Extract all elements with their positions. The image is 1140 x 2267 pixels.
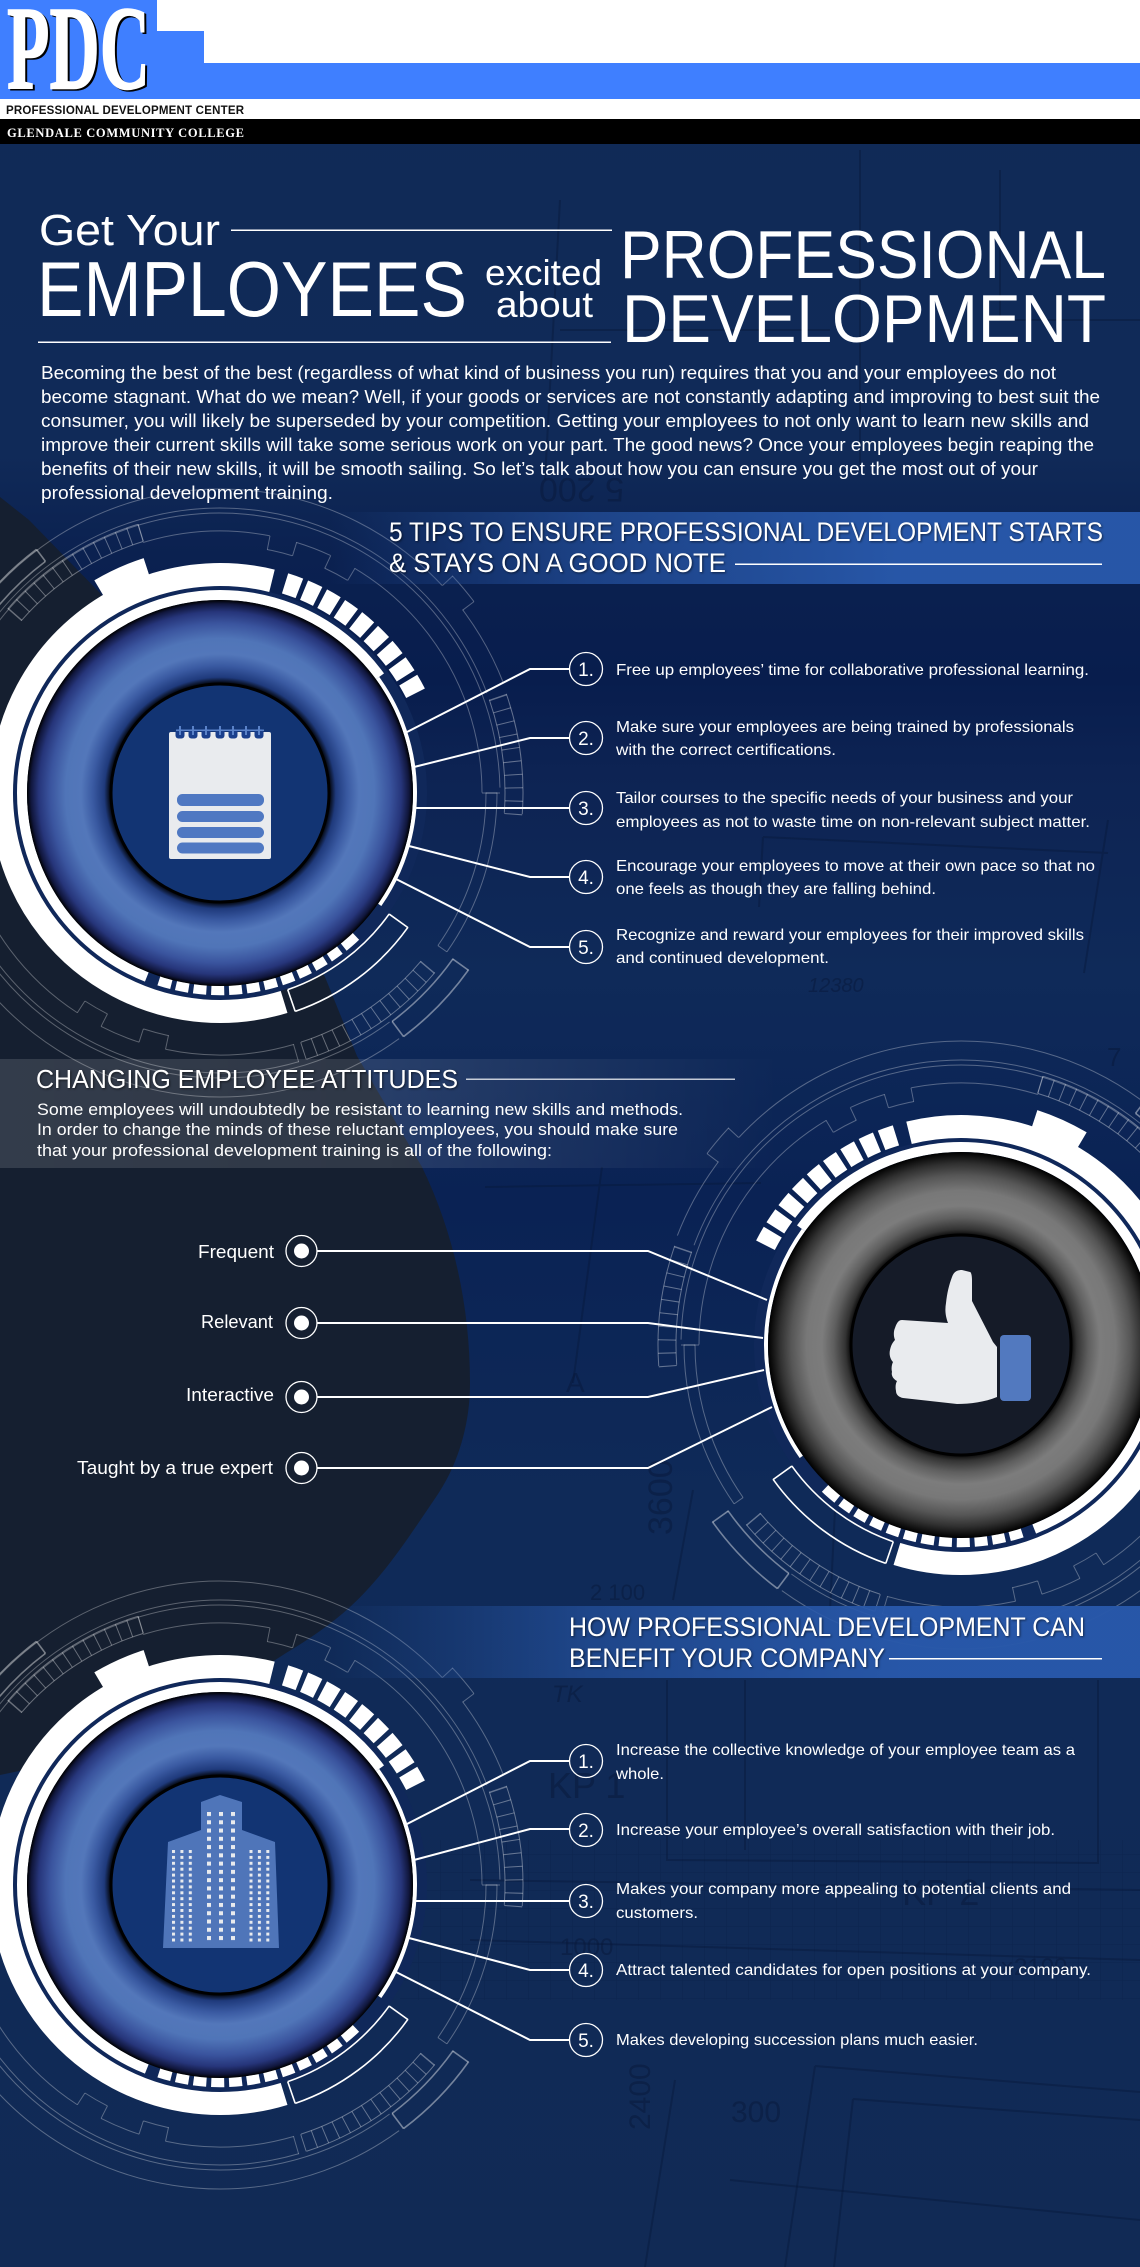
blueprint background: 12380 [808, 975, 864, 997]
title: get your: Get Your [39, 206, 220, 255]
item interactive [186, 1382, 317, 1412]
intro paragraph: become stagnant. What do we mean? Well, if your goods or services are not constantly adapting and improving to best suit the [41, 387, 1100, 407]
logo subtitle: PROFESSIONAL DEVELOPMENT CENTER [6, 105, 245, 117]
banner 2 paragraph: Some employees will undoubtedly be resistant to learning new skills and methods. [37, 1100, 683, 1119]
blueprint background: 5 200 [539, 470, 624, 508]
dial 3 disc [27, 1692, 413, 2078]
benefit 3: Makes your company more appealing to potential clients and [616, 1881, 1071, 1898]
tips list [570, 652, 1095, 967]
benefit 1: Increase the collective knowledge of your employee team as a [616, 1742, 1075, 1759]
banner 1 band [0, 512, 1140, 584]
banner 3 heading [569, 1612, 1085, 1673]
blueprint background: 7 [1107, 1042, 1121, 1072]
tip 1: Free up employees’ time for collaborative professional learning. [616, 662, 1089, 679]
benefit 5: 5. [578, 2031, 594, 2052]
benefit 5: Makes developing succession plans much easier. [616, 2032, 978, 2049]
icon: notepad [169, 726, 271, 859]
tip 3: employees as not to waste time on non-relevant subject matter. [616, 814, 1090, 831]
item interactive: Interactive [186, 1385, 274, 1405]
banner: 5 tips [0, 512, 1140, 584]
blueprint background [400, 150, 1140, 2267]
banner: how professional development can benefit [0, 1606, 1140, 1678]
blueprint background: KP 1 [548, 1765, 625, 1806]
item relevant: Relevant [201, 1312, 273, 1332]
benefit 1 [570, 1742, 1075, 1783]
benefits list [570, 1742, 1091, 2056]
logo blue band [0, 0, 1140, 99]
benefit 4: 4. [578, 1961, 594, 1982]
white top area [0, 0, 1140, 99]
black strip [0, 119, 1140, 144]
intro paragraph: Becoming the best of the best (regardless of what kind of business you run) requires that you and your employees do not [41, 363, 1056, 383]
blueprint background: 2400 [624, 2063, 657, 2130]
tip 4: Encourage your employees to move at their own pace so that no [616, 858, 1095, 875]
header logo band [0, 0, 1140, 144]
tip 3 [570, 790, 1090, 831]
tip 1: 1. [578, 660, 594, 681]
logo letters PDC [7, 0, 152, 116]
banner 2 paragraph [37, 1100, 683, 1160]
banner 2 heading: CHANGING EMPLOYEE ATTITUDES [36, 1064, 458, 1094]
title rule lower [38, 342, 611, 343]
banner: changing employee attitudes [0, 1059, 780, 1168]
title [37, 206, 1106, 357]
benefit 2 [570, 1814, 1055, 1846]
tip 2: 2. [578, 729, 594, 750]
dial 2 disc [768, 1152, 1140, 1538]
benefit 1: 1. [578, 1752, 594, 1773]
benefit 3: customers. [616, 1905, 698, 1922]
tip 5: Recognize and reward your employees for their improved skills [616, 927, 1084, 944]
tip 3: 3. [578, 799, 594, 820]
tip 3: Tailor courses to the specific needs of your business and your [616, 790, 1074, 807]
dial 1 rings [0, 344, 669, 1242]
banner 3 heading: BENEFIT YOUR COMPANY [569, 1643, 885, 1673]
tip 2: Make sure your employees are being trained by professionals [616, 719, 1074, 736]
banner 3 band [0, 1606, 1140, 1678]
blueprint background: A [566, 1367, 585, 1398]
dial 3 rings [0, 1436, 669, 2267]
benefits leaders [396, 1761, 570, 2040]
dial 2 rings [512, 896, 1140, 1794]
banner 3 rule [889, 1658, 1102, 1660]
intro paragraph: improve their current skills will take some serious work on your part. The good news? Once your employees begin reaping the [41, 435, 1094, 455]
icon: office building [163, 1795, 279, 1948]
intro paragraph: professional development training. [41, 483, 333, 503]
tip 5 [570, 927, 1084, 967]
banner 2 band [0, 1059, 780, 1168]
benefit 4: Attract talented candidates for open positions at your company. [616, 1962, 1091, 1979]
banner 1 heading [389, 517, 1103, 578]
title: development: DEVELOPMENT [622, 281, 1106, 357]
tip 5: and continued development. [616, 950, 829, 967]
tip 4: 4. [578, 868, 594, 889]
logo college name: GLENDALE COMMUNITY COLLEGE [7, 126, 244, 140]
blueprint background: 300 [731, 2096, 781, 2129]
attitude list [77, 1236, 317, 1484]
title: employees: EMPLOYEES [37, 245, 467, 333]
banner 3 heading: HOW PROFESSIONAL DEVELOPMENT CAN [569, 1612, 1085, 1642]
benefit 2: 2. [578, 1821, 594, 1842]
blueprint background: 1000 [560, 1934, 613, 1961]
benefit 1: whole. [615, 1766, 664, 1783]
item taught by a true expert: Taught by a true expert [77, 1458, 273, 1478]
banner 1 heading: & STAYS ON A GOOD NOTE [389, 548, 726, 578]
blueprint background: ×2100 [1000, 1954, 1067, 1981]
benefit 2: Increase your employee’s overall satisfaction with their job. [616, 1822, 1055, 1839]
benefit 4 [570, 1954, 1091, 1986]
title: excited: excited [485, 252, 602, 293]
item taught by a true expert [77, 1452, 317, 1484]
intro paragraph: consumer, you will likely be superseded by your competition. Getting your employees to not only want to learn new skills and [41, 411, 1089, 431]
blueprint background: TK [552, 1681, 584, 1708]
dark overlay shape [0, 497, 470, 1775]
banner 2 paragraph: that your professional development training is all of the following: [37, 1141, 552, 1160]
tip 2 [570, 719, 1074, 759]
title: professional: PROFESSIONAL [620, 217, 1106, 293]
tip 4: one feels as though they are falling behind. [616, 881, 936, 898]
benefit 3 [570, 1881, 1071, 1922]
banner 1 rule [735, 564, 1102, 565]
banner 1 heading: 5 TIPS TO ENSURE PROFESSIONAL DEVELOPMENT STARTS [389, 517, 1103, 547]
blueprint background: 2 100 [590, 1580, 645, 1605]
banner 2 paragraph: In order to change the minds of these reluctant employees, you should make sure [37, 1120, 678, 1139]
dial 1 disc [27, 600, 413, 986]
item relevant [201, 1308, 317, 1338]
title rule upper [231, 230, 612, 231]
tip 1 [570, 652, 1089, 686]
blueprint background: 3600 [642, 1459, 680, 1535]
title: about: about [496, 284, 593, 325]
attitude leaders [317, 1251, 772, 1468]
benefit 3: 3. [578, 1892, 594, 1913]
item frequent: Frequent [198, 1242, 274, 1262]
item frequent [198, 1236, 317, 1266]
intro paragraph [41, 363, 1100, 503]
intro paragraph: benefits of their new skills, it will be smooth sailing. So let’s talk about how you can ensure you get the most out of your [41, 459, 1038, 479]
white strip [0, 99, 1140, 119]
banner 2 rule [466, 1078, 735, 1080]
tip 4 [570, 858, 1095, 898]
tips leaders [396, 669, 570, 947]
icon: thumbs up [890, 1270, 1031, 1404]
tip 2: with the correct certifications. [615, 742, 836, 759]
benefit 5 [570, 2024, 978, 2056]
blueprint background: KP 2 [902, 1872, 979, 1913]
tip 5: 5. [578, 938, 594, 959]
